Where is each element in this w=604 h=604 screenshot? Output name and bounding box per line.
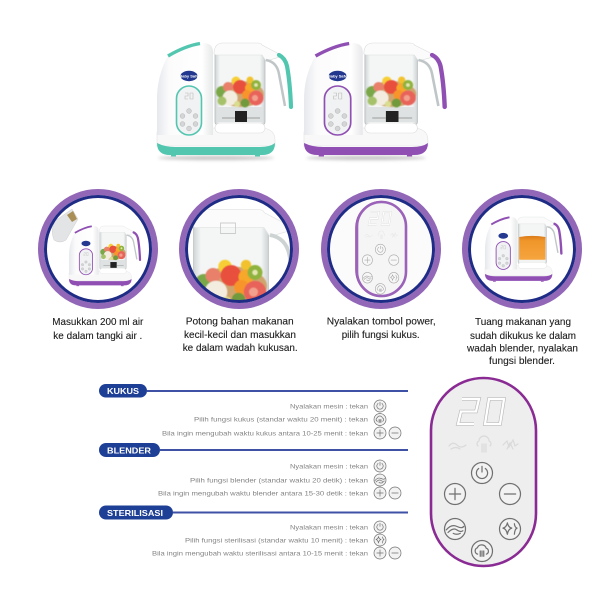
caption: step 4 — [466, 316, 578, 367]
product photo: teal food processor — [157, 43, 291, 160]
caption: step 3: Nyalakan tombol power, — [327, 316, 436, 328]
heading pill: blender — [99, 443, 408, 457]
step 3 circle: control panel — [324, 192, 438, 306]
instruction: choose function: Pilih fungsi sterilisasi (standar waktu 10 menit) : tekan — [185, 537, 368, 544]
product photo: purple food processor: Baby Safe — [328, 74, 348, 78]
product photo: purple food processor — [304, 43, 445, 160]
caption: step 3: pilih fungsi kukus. — [342, 329, 420, 341]
instruction: power on — [290, 400, 386, 412]
instruction: adjust time — [158, 487, 401, 499]
instruction: adjust time: Bila ingin mengubah waktu kukus antara 10-25 menit : tekan — [162, 430, 368, 437]
caption: step 2: ke dalam wadah kukusan. — [183, 342, 298, 354]
instruction: power on — [290, 460, 386, 472]
instruction: power on: Nyalakan mesin : tekan — [290, 403, 368, 410]
instruction: adjust time: Bila ingin mengubah waktu sterilisasi antara 10-15 menit : tekan — [152, 550, 368, 557]
step 4 circle: blender with orange puree — [465, 192, 579, 306]
caption: step 2 — [183, 316, 298, 354]
caption: step 2: Potong bahan makanan — [186, 316, 294, 328]
heading pill: sterilisasi: STERILISASI — [107, 508, 163, 518]
caption: step 1 — [52, 316, 144, 342]
jar close-up — [193, 209, 290, 300]
caption: step 1: Masukkan 200 ml air — [52, 316, 144, 328]
large control panel — [431, 378, 536, 566]
instruction: adjust time — [162, 427, 401, 439]
caption: step 4: wadah blender, nyalakan — [466, 342, 578, 354]
heading pill: kukus: KUKUS — [107, 386, 139, 396]
section: sterilisasi instructions — [99, 506, 408, 559]
instruction: power on: Nyalakan mesin : tekan — [290, 463, 368, 470]
caption: step 4: Tuang makanan yang — [475, 316, 571, 328]
instruction: choose function — [194, 414, 386, 426]
mini control panel — [356, 201, 406, 296]
heading pill: sterilisasi — [99, 506, 408, 520]
step 1 circle: filling the water tank — [41, 192, 155, 306]
instruction: adjust time: Bila ingin mengubah waktu blender antara 15-30 detik : tekan — [158, 490, 368, 497]
caption: step 4: fungsi blender. — [489, 355, 555, 367]
heading pill: blender: BLENDER — [107, 445, 151, 455]
instruction: choose function: Pilih fungsi blender (standar waktu 20 detik) : tekan — [190, 477, 368, 484]
product photo: teal food processor: Baby Safe — [179, 74, 199, 78]
caption: step 1: ke dalam tangki air . — [53, 330, 142, 342]
caption: step 2: kecil-kecil dan masukkan — [184, 329, 296, 341]
caption: step 4: sudah dikukus ke dalam — [470, 330, 576, 342]
step 2 circle: jar with fruit close-up — [179, 189, 299, 309]
machine illustration — [69, 226, 140, 286]
instruction: adjust time — [152, 547, 401, 559]
machine with blended food — [485, 217, 561, 282]
caption: step 3 — [327, 316, 436, 341]
section: blender instructions — [99, 443, 408, 499]
heading pill: kukus — [99, 384, 408, 398]
instruction: power on: Nyalakan mesin : tekan — [290, 524, 368, 531]
instruction: power on — [290, 521, 386, 533]
instruction: choose function — [185, 534, 386, 546]
section: kukus instructions — [99, 384, 408, 439]
instruction: choose function: Pilih fungsi kukus (standar waktu 20 menit) : tekan — [194, 416, 368, 423]
icon: water tank — [52, 209, 78, 242]
instruction: choose function — [190, 474, 386, 486]
